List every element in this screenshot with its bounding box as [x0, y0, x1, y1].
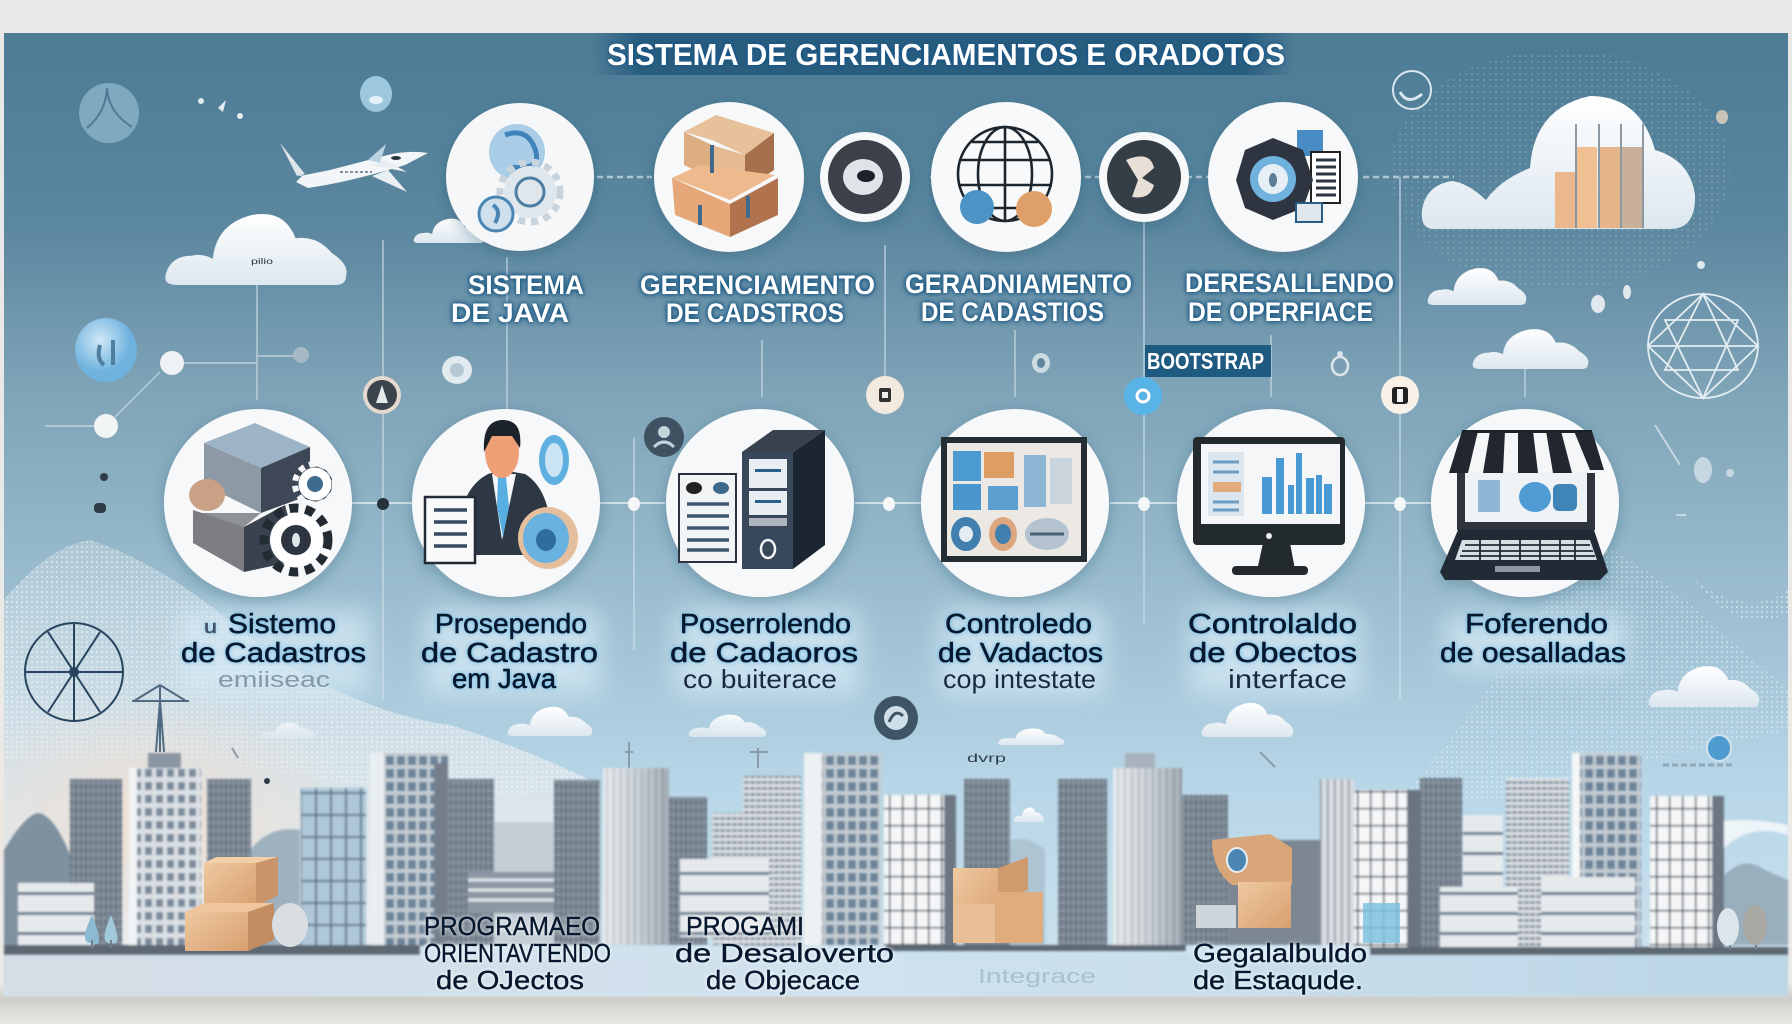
icon: tan part — [189, 479, 225, 511]
top circle 3: globe — [931, 102, 1081, 252]
label: estaque: de Estaqude. — [1193, 965, 1363, 995]
icon: faint marks right — [1655, 425, 1734, 516]
icon: shield circle — [79, 83, 139, 143]
cloud right small 2 — [1473, 329, 1588, 369]
label column 1: u — [204, 617, 217, 637]
icon: framed card grid — [941, 437, 1087, 562]
label: estaque — [1193, 938, 1367, 995]
bootstrap label: BOOTSTRAP — [1147, 348, 1264, 374]
node dots — [94, 347, 309, 438]
label glow — [180, 610, 1625, 695]
icon: monitor — [1193, 437, 1345, 575]
label: desaloverto: PROGAMI — [686, 911, 804, 941]
icon: sky antennas and specks — [232, 742, 1275, 784]
title: SISTEMA DE GERENCIAMENTOS E ORADOTOS — [607, 37, 1285, 72]
top circle 2: boxes — [654, 102, 804, 252]
cloud top left — [165, 214, 347, 285]
pin light 3 — [1381, 376, 1419, 414]
pin light 2 — [866, 376, 904, 414]
label column 4: Controledo — [945, 608, 1092, 639]
lower circle 6: storefront laptop — [1431, 409, 1619, 597]
top labels: DE CADASTIOS — [921, 297, 1104, 327]
icon: blue token right — [1663, 735, 1733, 765]
label column 1 — [181, 608, 366, 692]
label column 4 — [938, 608, 1103, 694]
icon: wire globe — [958, 127, 1052, 221]
icon: server cabinet — [742, 430, 825, 569]
chart: bars — [1262, 453, 1332, 514]
connector dots — [377, 497, 1406, 511]
small sky marks: dvrp — [967, 751, 1007, 765]
icon: ring top right — [1393, 71, 1431, 109]
top labels: GERENCIAMENTO — [640, 270, 875, 300]
lower circle 4: tablet panel — [921, 409, 1109, 597]
label column 2: em Java — [452, 663, 556, 694]
trees right — [1717, 905, 1767, 950]
icon: keyboard — [1440, 530, 1608, 580]
icon: blue blob — [75, 318, 137, 382]
icon: airplane — [280, 143, 428, 192]
icon: wheel left — [25, 623, 123, 721]
top circle 1: java gear — [446, 103, 594, 251]
label column 2: Prosependo — [435, 608, 587, 639]
label: faint interface: Integrace — [978, 966, 1096, 988]
pin dark lower — [874, 696, 918, 740]
icon: businessman — [459, 420, 551, 555]
icon: upper cube — [204, 423, 310, 513]
lower circle 3: server — [666, 409, 854, 597]
icon: cardboard boxes — [672, 115, 778, 237]
icon: lower cube — [193, 505, 300, 572]
icon: blue swirl — [489, 124, 545, 180]
label column 2: de Cadastro — [421, 637, 598, 668]
label column 5: Controlaldo — [1188, 608, 1357, 639]
top labels: SISTEMA — [468, 270, 584, 300]
icon: screen — [1457, 470, 1595, 530]
small icons row — [442, 356, 472, 384]
cloud right small 1 — [1428, 268, 1526, 305]
icon: small gear — [295, 464, 335, 504]
cloud right with bars — [1422, 96, 1695, 229]
icon: blue ball — [960, 190, 994, 224]
top labels: DE OPERFIACE — [1188, 297, 1373, 327]
boxes centre stack — [953, 857, 1043, 943]
mesh wave right — [1400, 547, 1788, 800]
mountains — [4, 813, 1788, 945]
icon: drop — [360, 76, 392, 112]
top circle 4: interface — [1208, 102, 1358, 252]
icon: big disc — [518, 507, 578, 569]
label: programação: PROGRAMAEO — [424, 911, 600, 941]
icon: gear — [500, 162, 560, 222]
lower circle 2: businessman — [412, 409, 600, 597]
icon: document — [425, 497, 475, 563]
icon: document list — [1311, 152, 1340, 203]
connector lines — [45, 177, 1525, 700]
label column 6: de oesalladas — [1440, 637, 1626, 668]
icon: specks right — [1591, 261, 1705, 313]
icon: dark marks left — [94, 473, 108, 513]
icon: small specks — [198, 98, 243, 119]
pin dark 1 — [363, 376, 401, 414]
icon: grey token — [1032, 353, 1050, 373]
icon: geometric ball — [1648, 294, 1758, 398]
top labels — [451, 268, 1394, 328]
icon: small card — [1296, 203, 1322, 222]
label: programação: ORIENTAVTENDO — [424, 938, 611, 968]
label column 3: co buiterace — [683, 664, 837, 694]
small dark circle A — [820, 132, 910, 222]
pin icons — [363, 376, 1419, 740]
icon: blue document — [1297, 130, 1323, 156]
label column 4: de Vadactos — [938, 637, 1103, 668]
top labels: GERADNIAMENTO — [905, 269, 1132, 299]
label: desaloverto: de Desaloverto — [675, 938, 894, 968]
label column 5: de Obectos — [1189, 637, 1357, 668]
tiny cloud text: pilio — [251, 257, 274, 266]
label: desaloverto — [675, 911, 894, 995]
label column 5: interface — [1228, 664, 1347, 694]
dotted glow top — [1390, 50, 1730, 290]
label column 3 — [670, 608, 858, 694]
label column 1: de Cadastros — [181, 637, 366, 668]
label column 3: Poserrolendo — [680, 608, 851, 639]
buildings centre — [603, 753, 1228, 946]
label column 6: Foferendo — [1465, 608, 1608, 639]
ground road — [4, 945, 1788, 996]
icon: antenna crane — [132, 685, 189, 752]
label column 1: emiiseac — [218, 667, 330, 692]
bottom labels — [424, 911, 1367, 995]
label: programação: de OJectos — [436, 965, 584, 995]
lower circle 1: sistema de cadastros — [164, 409, 352, 597]
top labels: DE CADSTROS — [666, 298, 844, 328]
mesh wave left — [0, 540, 600, 950]
dot top right — [1716, 110, 1728, 124]
lower sky clouds — [261, 666, 1759, 822]
icon: document — [679, 474, 736, 562]
chart: left column — [1208, 452, 1244, 516]
cloud small behind circle — [414, 219, 484, 243]
label column 5 — [1188, 608, 1357, 694]
city skyline — [4, 753, 1788, 996]
icon: dark dial — [1236, 138, 1313, 220]
boxes and trees at ground — [85, 834, 1767, 951]
bar chart in cloud — [1555, 124, 1643, 228]
label: desaloverto: de Objecace — [706, 965, 860, 995]
top labels: DE JAVA — [451, 298, 569, 328]
icon: orange ball — [1016, 191, 1052, 227]
lower circle 5: monitor chart — [1177, 409, 1365, 597]
small dark circle B — [1099, 132, 1189, 222]
buildings right — [1228, 753, 1724, 948]
icon: awning — [1449, 430, 1604, 473]
label: programação — [424, 911, 611, 995]
label column 2 — [421, 608, 598, 694]
label column 3: de Cadaoros — [670, 637, 858, 668]
lower labels — [181, 608, 1626, 694]
trees left — [85, 915, 118, 948]
icon: large gear — [264, 508, 328, 572]
icon: tiny bell — [1332, 351, 1348, 375]
pin blue — [1124, 377, 1162, 415]
buildings left — [18, 753, 600, 947]
top labels: DERESALLENDO — [1185, 268, 1394, 298]
teal panel — [1363, 903, 1400, 943]
label column 1: Sistemo — [228, 608, 336, 639]
boxes right stack — [1196, 834, 1292, 928]
pin dark side — [644, 417, 684, 457]
icon: blue small — [479, 197, 513, 231]
label: estaque: Gegalalbuldo — [1193, 938, 1367, 968]
boxes left stack — [185, 857, 308, 951]
label column 6 — [1440, 608, 1626, 668]
icon: blue shield — [539, 435, 569, 485]
label column 4: cop intestate — [943, 664, 1096, 694]
